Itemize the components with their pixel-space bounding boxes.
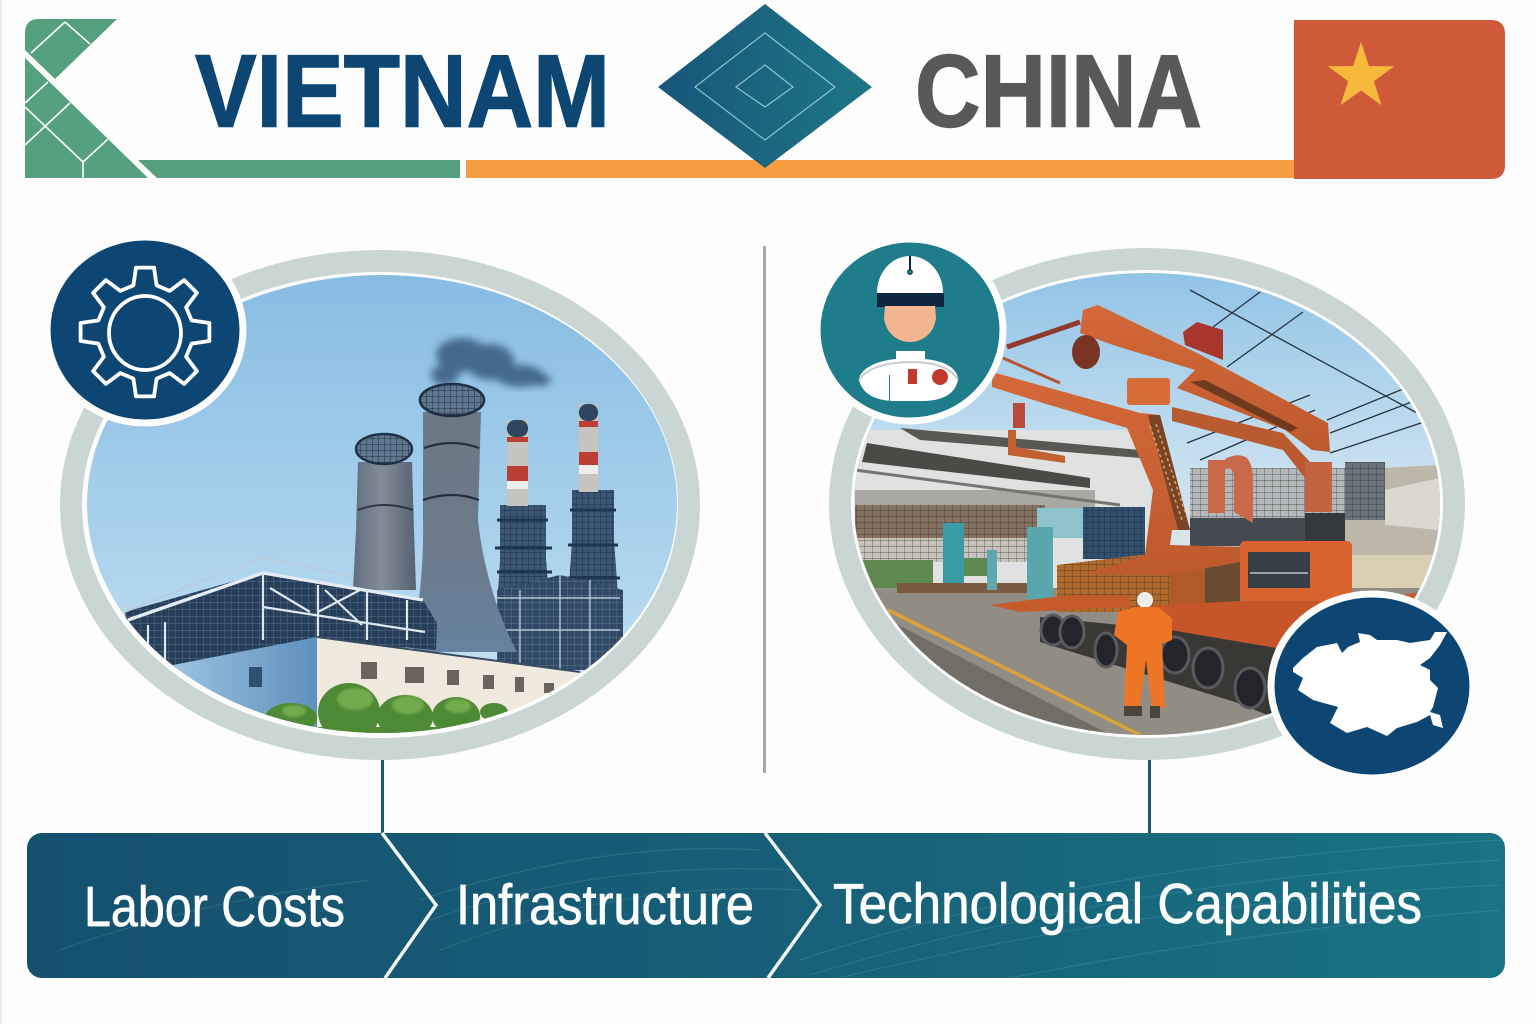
wires: [1187, 290, 1430, 460]
teal structures: [943, 508, 1083, 599]
icon: gear: [47, 237, 243, 423]
small tower: [353, 434, 416, 590]
lower crane arm: [992, 372, 1240, 575]
green bushes: [860, 558, 987, 588]
dark overhead bands: [862, 443, 1090, 488]
low rail clutter: [897, 583, 1027, 593]
center diamond emblem: [658, 4, 872, 168]
ground: [874, 588, 1420, 735]
orange rule: [466, 160, 1296, 178]
label: Technological Capabilities: Technological Capabilities: [833, 872, 1422, 936]
banner: comparison factors: [27, 833, 1505, 980]
wheel train: [1040, 617, 1300, 716]
right steel block: [497, 575, 623, 670]
connector: Vietnam to banner: [381, 758, 384, 834]
header band: [25, 4, 1505, 179]
pipes: [1208, 455, 1253, 523]
chevron dividers: [382, 833, 820, 978]
smoke: [431, 338, 551, 387]
flag with star: [1294, 20, 1505, 179]
orange cab: [1240, 541, 1352, 601]
rust lattice: [855, 490, 1095, 508]
connector: China to banner: [1148, 758, 1151, 834]
building: [173, 637, 580, 735]
torso: [859, 351, 958, 401]
background industrial clutter: [850, 428, 1450, 595]
upper crane arm: [1080, 305, 1330, 452]
logo: green geometric tiles: [25, 19, 148, 178]
right building and lattice: [1345, 465, 1440, 590]
title: Vietnam: VIETNAM: [195, 34, 610, 148]
striped stack 2: [579, 404, 598, 492]
back scaffold towers: [495, 490, 622, 650]
rust base machinery: [990, 555, 1240, 615]
photo: power plant: [80, 270, 690, 741]
ring: [840, 259, 1454, 749]
icon: map: [1271, 594, 1473, 778]
panel: China: [817, 239, 1473, 778]
lower parallel beam and leg: [1172, 407, 1332, 512]
suspended jib: [1008, 403, 1065, 463]
pale backdrop: [854, 430, 1150, 548]
ring: [71, 261, 689, 749]
striped stack 1: [507, 420, 528, 506]
blue scaffold: [1083, 507, 1145, 559]
big tower: [412, 384, 517, 652]
photo: crane machinery: [840, 265, 1460, 745]
steel structure left: [125, 557, 437, 668]
hook and cables: [1003, 322, 1223, 383]
center divider: [763, 246, 766, 773]
face: [884, 306, 936, 342]
worker: [1114, 592, 1172, 718]
label: Labor Costs: Labor Costs: [84, 875, 345, 939]
yellow road line: [888, 610, 1140, 735]
trees: [266, 683, 508, 733]
wheels: [1041, 615, 1265, 708]
panel: Vietnam: [47, 237, 690, 749]
title: China: CHINA: [915, 34, 1202, 148]
icon: worker: [817, 239, 1003, 421]
label: Infrastructure: Infrastructure: [456, 873, 754, 937]
hard hat: [877, 256, 944, 307]
trailer deck: [1130, 592, 1418, 648]
green rule: [138, 160, 460, 178]
